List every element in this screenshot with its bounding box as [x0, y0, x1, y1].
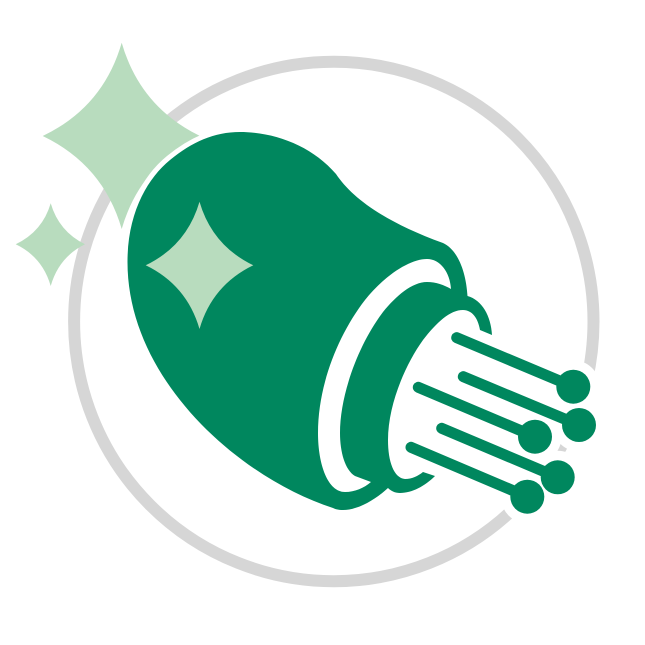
cable jacket and sleeve silhouette	[128, 132, 492, 510]
white halos behind fiber tips	[501, 360, 606, 523]
tip 3	[518, 420, 552, 454]
icon: sparkle on cable	[146, 202, 253, 329]
icon: large sparkle	[43, 43, 200, 229]
icon: small sparkle	[16, 203, 85, 286]
strand 4	[442, 428, 558, 477]
strand 1	[457, 338, 573, 387]
fiber tips	[510, 370, 596, 514]
tip 5	[510, 480, 544, 514]
grey background ring	[74, 62, 594, 581]
white collar band	[318, 259, 451, 492]
strand 2	[463, 377, 579, 425]
strand 5	[411, 447, 527, 497]
cable	[128, 132, 492, 510]
tip 2	[562, 408, 596, 442]
strand 3	[418, 387, 535, 437]
tip 4	[541, 460, 575, 494]
fiber strands	[411, 338, 579, 497]
tip 1	[556, 370, 590, 404]
